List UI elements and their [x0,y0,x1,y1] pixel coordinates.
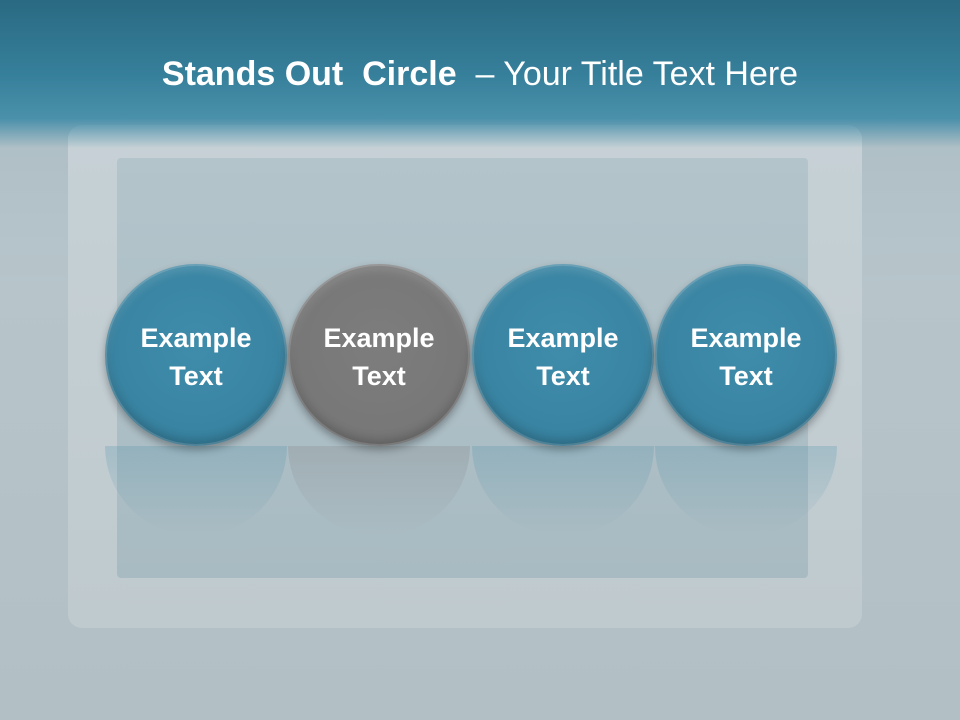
header band [0,0,960,148]
circle 1 [105,264,287,446]
circle 3: Example [507,323,619,353]
circle 4 [655,264,837,446]
tablet screen [117,158,808,578]
circle 3: Text [536,361,590,391]
tablet [68,125,862,628]
circle 1: Text [169,361,223,391]
circle 4: Example [690,323,802,353]
circle 2: Example [323,323,435,353]
circle 2 [288,264,470,446]
circle 2: Text [352,361,406,391]
title: Stands Out Circle – Your Title Text Here [162,55,798,93]
circle 4: Text [719,361,773,391]
reflections [105,446,837,510]
circle 1: Example [140,323,252,353]
circle 3 [472,264,654,446]
